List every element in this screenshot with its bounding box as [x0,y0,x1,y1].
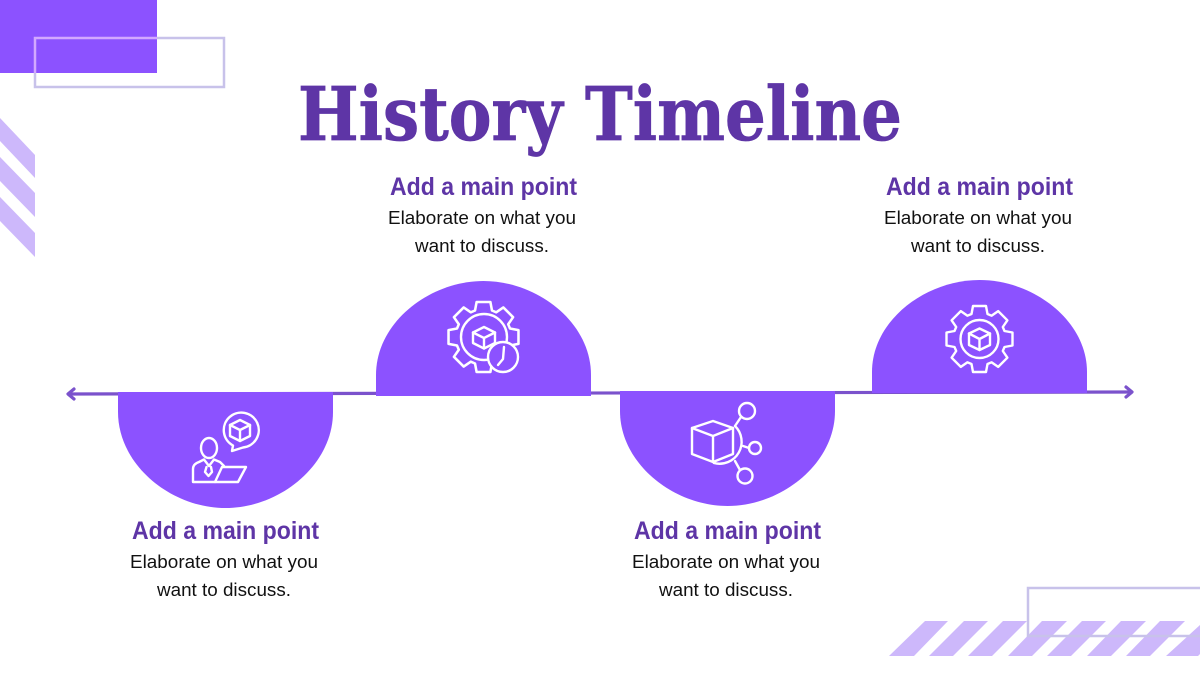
text block: point 3 [632,517,822,600]
text block: point 2: Elaborate on what you [388,207,576,228]
decoration: left stripes [0,118,35,257]
decoration: top-left block [0,0,157,73]
title: History Timeline [298,72,902,158]
milestone 1: lower half-dome [118,392,333,508]
text block: point 2 [388,173,578,256]
icon: box with network nodes [692,403,761,484]
text block: point 4: Add a main point [886,173,1074,201]
decoration: bottom-right stripes [889,621,1200,656]
milestone 4: upper half-dome [872,280,1087,393]
icon: gear with box [946,306,1012,372]
text block: point 3: want to discuss. [658,579,793,600]
text block: point 4 [884,173,1074,256]
icon: person at laptop with box speech bubble [193,413,259,482]
text block: point 2: want to discuss. [414,235,549,256]
icon: gear with box and clock [449,302,518,372]
text block: point 3: Elaborate on what you [632,551,820,572]
decoration: bottom-right outline rectangle [1028,588,1200,636]
text block: point 1: want to discuss. [156,579,291,600]
decoration: top-left outline rectangle [35,38,224,87]
text block: point 4: Elaborate on what you [884,207,1072,228]
text block: point 4: want to discuss. [910,235,1045,256]
text block: point 3: Add a main point [634,517,822,545]
text block: point 2: Add a main point [390,173,578,201]
text block: point 1: Add a main point [132,517,320,545]
text block: point 1 [130,517,320,600]
timeline arrow [68,387,1132,399]
decoration: outline over block [35,38,157,73]
milestone 3: lower half-dome [620,391,835,506]
milestone 2: upper half-dome [376,281,591,396]
text block: point 1: Elaborate on what you [130,551,318,572]
